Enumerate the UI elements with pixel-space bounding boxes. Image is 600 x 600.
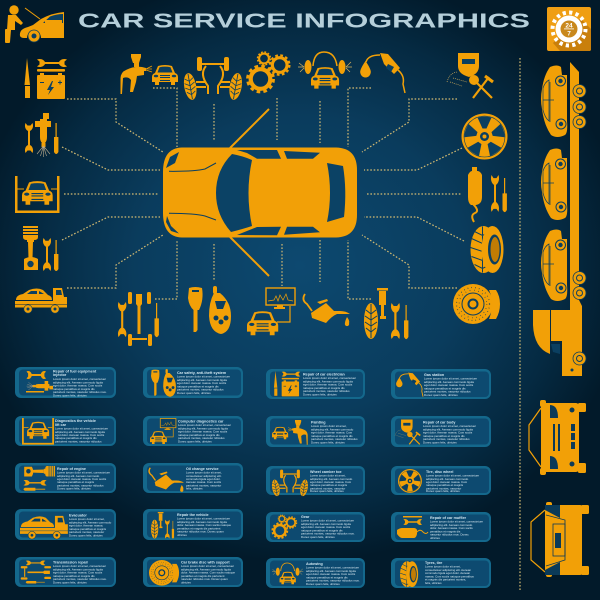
text: adipiscing elit. Aenean commodo xyxy=(430,523,473,527)
icon xyxy=(271,470,309,497)
panel: tire disc wheel xyxy=(391,466,491,495)
text: natoque penatibus et magnis dis xyxy=(301,528,343,532)
icon: muffler and tools xyxy=(468,167,507,222)
text: adipiscing elit. Aenean commodo ligula xyxy=(178,426,228,430)
badge: 24/7: 24 xyxy=(565,22,573,30)
panels xyxy=(15,367,491,588)
text: eget dolor. Aenean massa. Cum sociis xyxy=(178,430,228,434)
central car top view xyxy=(163,109,357,276)
text: adipiscing elit. Aenean commodo ligula xyxy=(303,379,353,383)
text: Lorem ipsum dolor sit amet, xyxy=(310,474,346,478)
icon: alloy wheel xyxy=(457,112,509,164)
text: dolor. Aenean massa. Cum sociis natoque xyxy=(177,523,231,527)
icon xyxy=(20,516,68,539)
text: Lorem ipsum dolor sit amet, xyxy=(425,564,461,568)
text: ultricies xyxy=(430,536,440,540)
text: dolor. Aenean massa. Cum sociis natoque xyxy=(181,571,235,575)
icon xyxy=(21,561,51,583)
text: Lorem ipsum dolor sit amet, consectetuer xyxy=(303,376,356,380)
icon: spray gun and car xyxy=(120,54,178,94)
icon: piston and tools xyxy=(23,226,58,271)
text: natoque penatibus et magnis xyxy=(69,527,107,531)
text: adipiscing elit. Aenean commodo ligula xyxy=(306,569,356,573)
text: adipiscing elit. Aenean commodo xyxy=(310,477,353,481)
text: parturient montes, nascetur xyxy=(310,486,345,490)
text: adipiscing elit. Aenean commodo ligula xyxy=(181,567,231,571)
car front view xyxy=(529,400,586,475)
text: natoque penatibus et magnis dis xyxy=(53,387,95,391)
text: Donec quam felis, ultricies xyxy=(426,489,460,493)
text: eget dolor. Aenean massa. Cum sociis xyxy=(53,571,103,575)
text: parturient montes, nascetur xyxy=(69,530,104,534)
text: Lorem ipsum dolor sit amet, xyxy=(69,517,105,521)
icon xyxy=(272,515,297,538)
icon xyxy=(395,420,420,444)
icon: tire xyxy=(470,226,504,273)
text: Lorem ipsum dolor sit amet, consectetuer xyxy=(177,516,230,520)
text: commodo ligula eget dolor. Aenean xyxy=(425,571,471,575)
text: adipiscing elit. Aenean commodo ligula xyxy=(423,427,473,431)
text: eget dolor. Aenean massa. Cum sociis xyxy=(57,477,107,481)
icon xyxy=(149,560,179,586)
icon: battery and tools xyxy=(24,58,67,99)
text: ultricies xyxy=(177,533,187,537)
title: CAR SERVICE INFOGRAPHICS xyxy=(78,10,530,32)
icon xyxy=(149,468,184,492)
text: Lorem ipsum dolor sit amet, consectetuer xyxy=(53,377,106,381)
panel: car electrician xyxy=(266,369,365,399)
text: Repair of car muffler xyxy=(430,516,467,520)
text: adipiscing elit. Aenean commodo xyxy=(311,427,354,431)
text: Autowing xyxy=(306,562,323,566)
text: Donec quam felis, ultricies xyxy=(69,534,103,538)
text: natoque penatibus et magnis dis xyxy=(53,574,95,578)
text: adipiscing elit. Aenean commodo ligula xyxy=(177,378,227,382)
text: Donec quam felis, ultricies xyxy=(178,440,212,444)
text: felis, ultricies xyxy=(425,581,442,585)
text: parturient montes, nascetur ridiculus mus. xyxy=(301,532,355,536)
text: eget dolor. Aenean massa. Cum xyxy=(311,431,353,435)
text: Gear xyxy=(301,515,310,519)
text: Lorem ipsum dolor sit amet, consectetuer xyxy=(306,566,359,570)
text: adipiscing elit. Aenean commodo ligula xyxy=(55,430,105,434)
icon xyxy=(272,420,308,445)
text: penatibus et magnis dis parturient xyxy=(177,526,221,530)
car transporter truck xyxy=(533,62,586,376)
text: nascetur ridiculus mus. Donec xyxy=(430,533,469,537)
text: ultricies xyxy=(181,580,191,584)
panel: car muffler xyxy=(391,512,491,542)
text: natoque penatibus et magnis dis xyxy=(177,384,219,388)
icon xyxy=(400,561,418,587)
text: Lorem ipsum dolor sit amet, xyxy=(186,470,222,474)
text: eget dolor. Aenean massa. Cum sociis xyxy=(303,383,353,387)
text: adipiscing elit. Aenean commodo ligula xyxy=(301,522,351,526)
icon xyxy=(150,419,176,444)
text: Repair of car body xyxy=(423,420,456,424)
text: natoque penatibus et magnis dis xyxy=(306,575,348,579)
text: natoque penatibus et magnis dis xyxy=(311,434,353,438)
text: Lorem ipsum dolor sit amet, consectetuer xyxy=(424,376,477,380)
icon xyxy=(151,512,174,539)
text: Lorem ipsum dolor sit amet, consectetuer xyxy=(423,424,476,428)
panel: wheel camber xyxy=(266,466,365,497)
text: Repair of car electrician xyxy=(303,372,346,376)
text: parturient montes, nascetur ridiculus xyxy=(423,437,470,441)
icon: brake disc xyxy=(453,284,500,324)
badge: 24/7 xyxy=(547,7,591,51)
icon: wheel suspension xyxy=(182,57,244,101)
panel: gear xyxy=(266,512,365,542)
text: Repair the vehicle xyxy=(177,513,209,517)
text: Donec quam felis, ultricies xyxy=(53,580,87,584)
text: consectetuer adipiscing elit. Aenean xyxy=(425,568,472,572)
text: et magnis dis parturient montes, xyxy=(425,578,466,582)
text: Tyres, tire xyxy=(425,561,442,565)
icon xyxy=(274,371,300,396)
text: eget dolor. Aenean massa. xyxy=(69,524,103,528)
dotted connector lines xyxy=(62,58,520,590)
panel: computer diagnostics xyxy=(143,416,243,446)
text: parturient montes, nascetur ridiculus mus. xyxy=(306,579,360,583)
text: Donec quam felis, ultricies xyxy=(57,487,91,491)
text: Painting xyxy=(311,420,326,424)
panel: brake disc xyxy=(143,557,243,587)
text: adipiscing elit. Aenean commodo ligula xyxy=(424,380,474,384)
text: natoque penatibus et magnis dis xyxy=(423,434,465,438)
text: dolor. Aenean massa. Cum sociis xyxy=(430,526,473,530)
panel: transmission xyxy=(15,557,116,587)
text: Lorem ipsum dolor sit amet, consectetuer xyxy=(181,564,234,568)
icon: car lift xyxy=(15,176,60,213)
text: natoque penatibus et magnis dis xyxy=(55,436,97,440)
icon xyxy=(26,371,53,392)
text: injector xyxy=(53,373,67,377)
text: Diagnostics the vehicle xyxy=(55,419,96,423)
text: consectetuer adipiscing elit. xyxy=(186,474,222,478)
text: Car safety, anti-theft system xyxy=(177,371,227,375)
text: parturient montes, nascetur ridiculus mus. xyxy=(53,390,107,394)
text: adipiscing elit. Aenean commodo ligula xyxy=(53,567,103,571)
panel: oil change xyxy=(143,463,243,493)
text: Donec quam felis, ultricies xyxy=(303,392,337,396)
text: Transmission repair xyxy=(53,560,89,564)
text: eget dolor. Aenean massa. Cum sociis xyxy=(55,433,105,437)
panel: evacuator xyxy=(15,509,116,540)
text: parturient montes, nascetur ridiculus xyxy=(424,390,471,394)
text: Donec quam felis, ultricies xyxy=(310,489,344,493)
icon xyxy=(151,369,176,397)
text: felis, ultricies xyxy=(186,487,203,491)
text: Aenean massa. Cum sociis xyxy=(186,480,222,484)
text: parturient montes, nascetur ridiculus xyxy=(55,439,102,443)
text: parturient montes, nascetur ridiculus xyxy=(57,483,104,487)
text: adipiscing elit. Aenean commodo xyxy=(57,474,100,478)
panel: gas station xyxy=(391,369,491,399)
text: parturient montes, nascetur ridiculus xyxy=(311,437,358,441)
icon xyxy=(396,373,423,397)
text: Computer diagnostics car xyxy=(178,420,224,424)
icon: key and alarm remote xyxy=(188,286,231,334)
panel: engine xyxy=(15,463,116,493)
main service icons xyxy=(15,52,509,346)
text: Car brake disc with support xyxy=(181,560,230,564)
text: Tire, disc wheel xyxy=(426,470,453,474)
icon: car with sparks xyxy=(298,52,352,89)
text: eget dolor. Aenean massa. Cum xyxy=(426,480,468,484)
text: nascetur ridiculus mus. Donec quam xyxy=(181,577,228,581)
text: eget dolor. Aenean massa. Cum sociis xyxy=(306,572,356,576)
icon: gears xyxy=(247,52,289,92)
text: Gas station xyxy=(424,373,445,377)
text: natoque penatibus et magnis dis xyxy=(178,433,220,437)
text: Lorem ipsum dolor sit amet, consectetuer xyxy=(53,564,106,568)
text: Lorem ipsum dolor sit amet, consectetuer xyxy=(177,374,230,378)
text: lift car xyxy=(55,423,67,427)
text: Lorem ipsum dolor sit amet, consectetuer xyxy=(178,423,231,427)
car rear view xyxy=(531,502,589,577)
icon: computer diagnostics xyxy=(247,288,295,335)
icon: tow truck xyxy=(15,288,67,313)
text: Donec quam felis, ultricies xyxy=(311,440,345,444)
panel: autowing xyxy=(266,558,365,588)
text: eget dolor. Aenean massa. Cum sociis xyxy=(424,383,474,387)
text: Wheel camber toe xyxy=(310,470,342,474)
icon: injector and tools xyxy=(25,113,58,157)
badge: 24/7: 7 xyxy=(567,30,571,38)
panel: lift diagnostics xyxy=(15,416,116,446)
icon xyxy=(396,468,423,495)
text: Repair of fuel equipment xyxy=(53,370,97,374)
text: parturient montes, nascetur ridiculus mus. xyxy=(53,577,107,581)
panel: tyres xyxy=(391,558,491,588)
text: Lorem ipsum dolor sit amet, consectetuer xyxy=(57,470,110,474)
icon xyxy=(22,418,54,445)
text: adipiscing elit. Aenean commodo ligula xyxy=(53,380,103,384)
icon: fuel nozzle xyxy=(360,53,405,93)
text: Donec quam felis, ultricies xyxy=(177,391,211,395)
text: parturient montes, nascetur ridiculus xyxy=(178,436,225,440)
icon: mechanic and car xyxy=(5,5,64,43)
text: eget dolor. Aenean massa. Cum sociis xyxy=(53,384,103,388)
text: parturient montes, nascetur xyxy=(426,486,461,490)
icon: shock absorber, tire and tools xyxy=(364,288,408,339)
text: natoque penatibus et magnis dis xyxy=(303,386,345,390)
text: Donec quam felis, ultricies xyxy=(424,393,458,397)
text: penatibus et magnis dis xyxy=(430,529,461,533)
text: Oil change service xyxy=(186,467,219,471)
text: Lorem ipsum dolor sit amet, consectetuer xyxy=(55,426,108,430)
text: commodo ligula eget dolor. xyxy=(186,477,221,481)
text: natoque penatibus et magnis xyxy=(310,483,348,487)
panel: car body xyxy=(391,416,491,447)
text: Repair of engine xyxy=(57,467,86,471)
text: natoque penatibus et magnis xyxy=(426,483,464,487)
text: Lorem ipsum dolor sit amet, consectetuer xyxy=(301,518,354,522)
text: parturient montes, nascetur ridiculus xyxy=(303,389,350,393)
icon: oil can xyxy=(303,294,350,326)
icon xyxy=(24,466,55,491)
text: Evacuator xyxy=(69,514,87,518)
text: Lorem ipsum dolor sit amet, xyxy=(311,424,347,428)
text: adipiscing elit. Aenean commodo xyxy=(426,477,469,481)
text: massa. Cum sociis natoque penatibus xyxy=(425,574,474,578)
text: parturient montes, nascetur ridiculus xyxy=(177,388,224,392)
text: adipiscing elit. Aenean commodo xyxy=(69,520,112,524)
panel: vehicle repair xyxy=(143,509,243,540)
panel: painting xyxy=(266,416,365,447)
text: natoque penatibus et magnis dis xyxy=(424,386,466,390)
text: eget dolor. Aenean massa. Cum sociis xyxy=(423,431,473,435)
text: Lorem ipsum dolor sit amet, consectetuer xyxy=(426,474,479,478)
text: Donec quam felis, ultricies xyxy=(301,535,335,539)
text: Lorem ipsum dolor sit amet, consectetuer xyxy=(430,520,483,524)
text: Donec quam felis, ultricies xyxy=(53,394,87,398)
text: penatibus et magnis dis parturient xyxy=(181,574,225,578)
panel: fuel equipment xyxy=(15,367,116,398)
text: parturient montes, nascetur xyxy=(186,483,221,487)
icon xyxy=(397,516,428,538)
text: adipiscing elit. Aenean commodo ligula xyxy=(177,520,227,524)
text: eget dolor. Aenean massa. Cum xyxy=(310,480,352,484)
text: eget dolor. Aenean massa. Cum sociis xyxy=(177,381,227,385)
icon: welding mask and hammers xyxy=(447,53,493,98)
text: Donec quam felis, ultricies xyxy=(423,440,457,444)
panel: anti-theft xyxy=(143,367,243,398)
text: Donec quam felis, ultricies xyxy=(306,582,340,586)
icon xyxy=(272,563,303,584)
text: eget dolor. Aenean massa. Cum sociis xyxy=(301,525,351,529)
text: natoque penatibus et magnis xyxy=(57,480,95,484)
text: nascetur ridiculus mus. Donec quam xyxy=(177,530,224,534)
icon: transmission xyxy=(118,292,159,346)
